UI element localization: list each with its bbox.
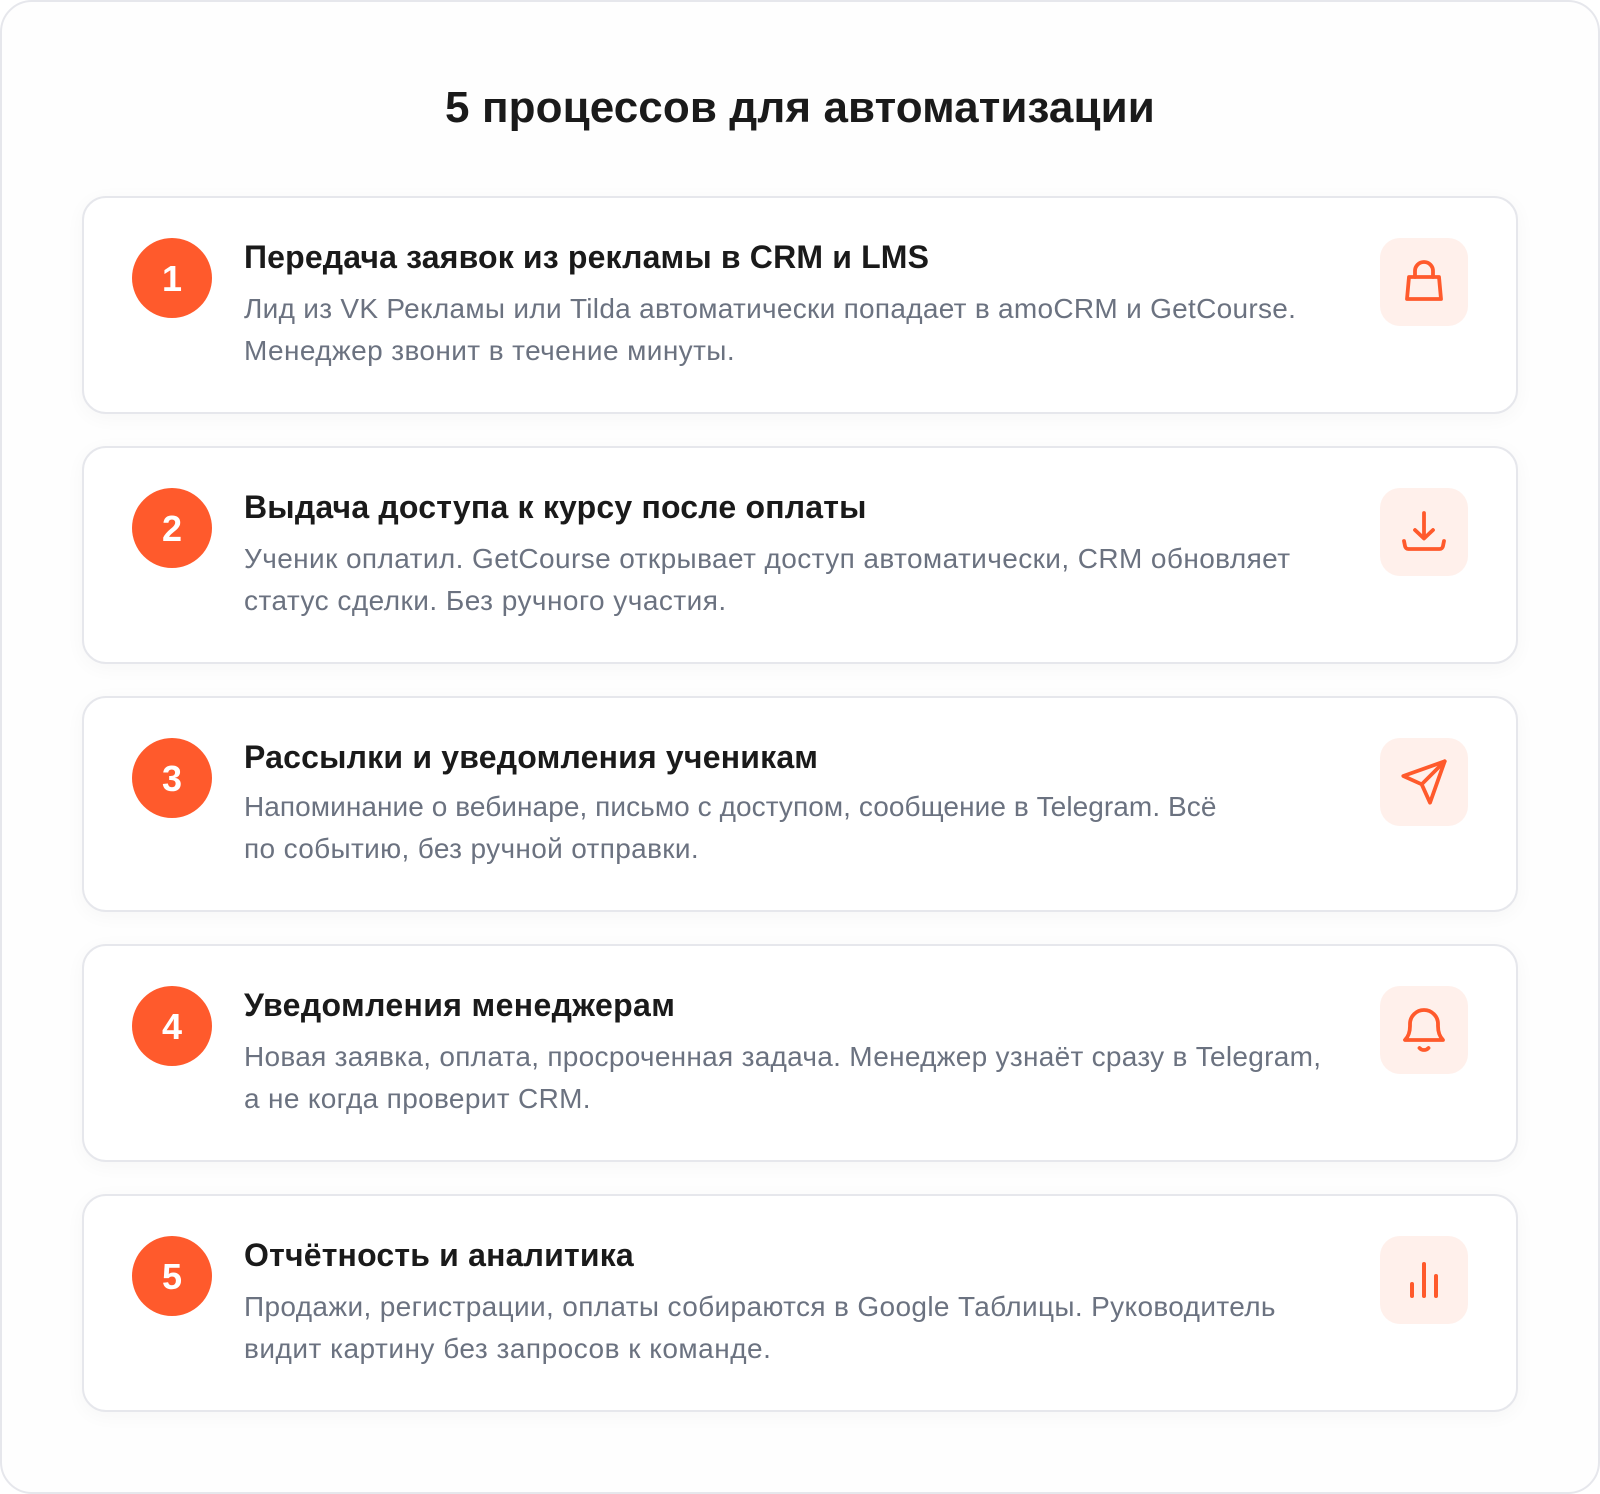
number badge 5 <box>132 1236 212 1316</box>
number badge 1 <box>132 238 212 318</box>
card 3 description: по событию, без ручной отправки. <box>244 833 699 864</box>
card 4 heading: Уведомления менеджерам <box>244 987 675 1023</box>
card 5 description: Продажи, регистрации, оплаты собираются в Google Таблицы. Руководитель <box>244 1291 1276 1322</box>
panel: card 3 <box>82 696 1518 912</box>
title: 5 процессов для автоматизации <box>445 83 1155 132</box>
card 3 description: Напоминание о вебинаре, письмо с доступом, сообщение в Telegram. Всё <box>244 791 1216 822</box>
icon: download <box>1380 488 1468 576</box>
card 4 description: а не когда проверит CRM. <box>244 1083 591 1114</box>
number badge 3: 3 <box>162 758 182 799</box>
panel: card 1 <box>82 196 1518 414</box>
panel: card 4 <box>82 944 1518 1162</box>
card 2 description <box>244 543 1290 616</box>
card 3 description <box>244 791 1216 864</box>
panel: card 2 <box>82 446 1518 664</box>
icon: bar chart <box>1380 1236 1468 1324</box>
number badge 5: 5 <box>162 1256 182 1297</box>
icon: paper plane <box>1380 738 1468 826</box>
number badge 4: 4 <box>162 1006 182 1047</box>
icon: bell <box>1380 986 1468 1074</box>
number badge 3 <box>132 738 212 818</box>
card 2 heading: Выдача доступа к курсу после оплаты <box>244 489 867 525</box>
card 3 heading: Рассылки и уведомления ученикам <box>244 739 818 775</box>
card 1 description: Менеджер звонит в течение минуты. <box>244 335 735 366</box>
number badge 2 <box>132 488 212 568</box>
icon: shopping bag <box>1380 238 1468 326</box>
card 1 description <box>244 293 1296 366</box>
number badge 2: 2 <box>162 508 182 549</box>
card 5 description: видит картину без запросов к команде. <box>244 1333 771 1364</box>
card 4 description <box>244 1041 1321 1114</box>
card 1 heading: Передача заявок из рекламы в CRM и LMS <box>244 239 929 275</box>
card 1 description: Лид из VK Рекламы или Tilda автоматически попадает в amoCRM и GetCourse. <box>244 293 1296 324</box>
card 2 description: Ученик оплатил. GetCourse открывает доступ автоматически, CRM обновляет <box>244 543 1290 574</box>
number badge 1: 1 <box>162 258 182 299</box>
card 2 description: статус сделки. Без ручного участия. <box>244 585 727 616</box>
panel: card 5 <box>82 1194 1518 1412</box>
card 5 heading: Отчётность и аналитика <box>244 1237 634 1273</box>
card 4 description: Новая заявка, оплата, просроченная задача. Менеджер узнаёт сразу в Telegram, <box>244 1041 1321 1072</box>
card 5 description <box>244 1291 1276 1364</box>
number badge 4 <box>132 986 212 1066</box>
